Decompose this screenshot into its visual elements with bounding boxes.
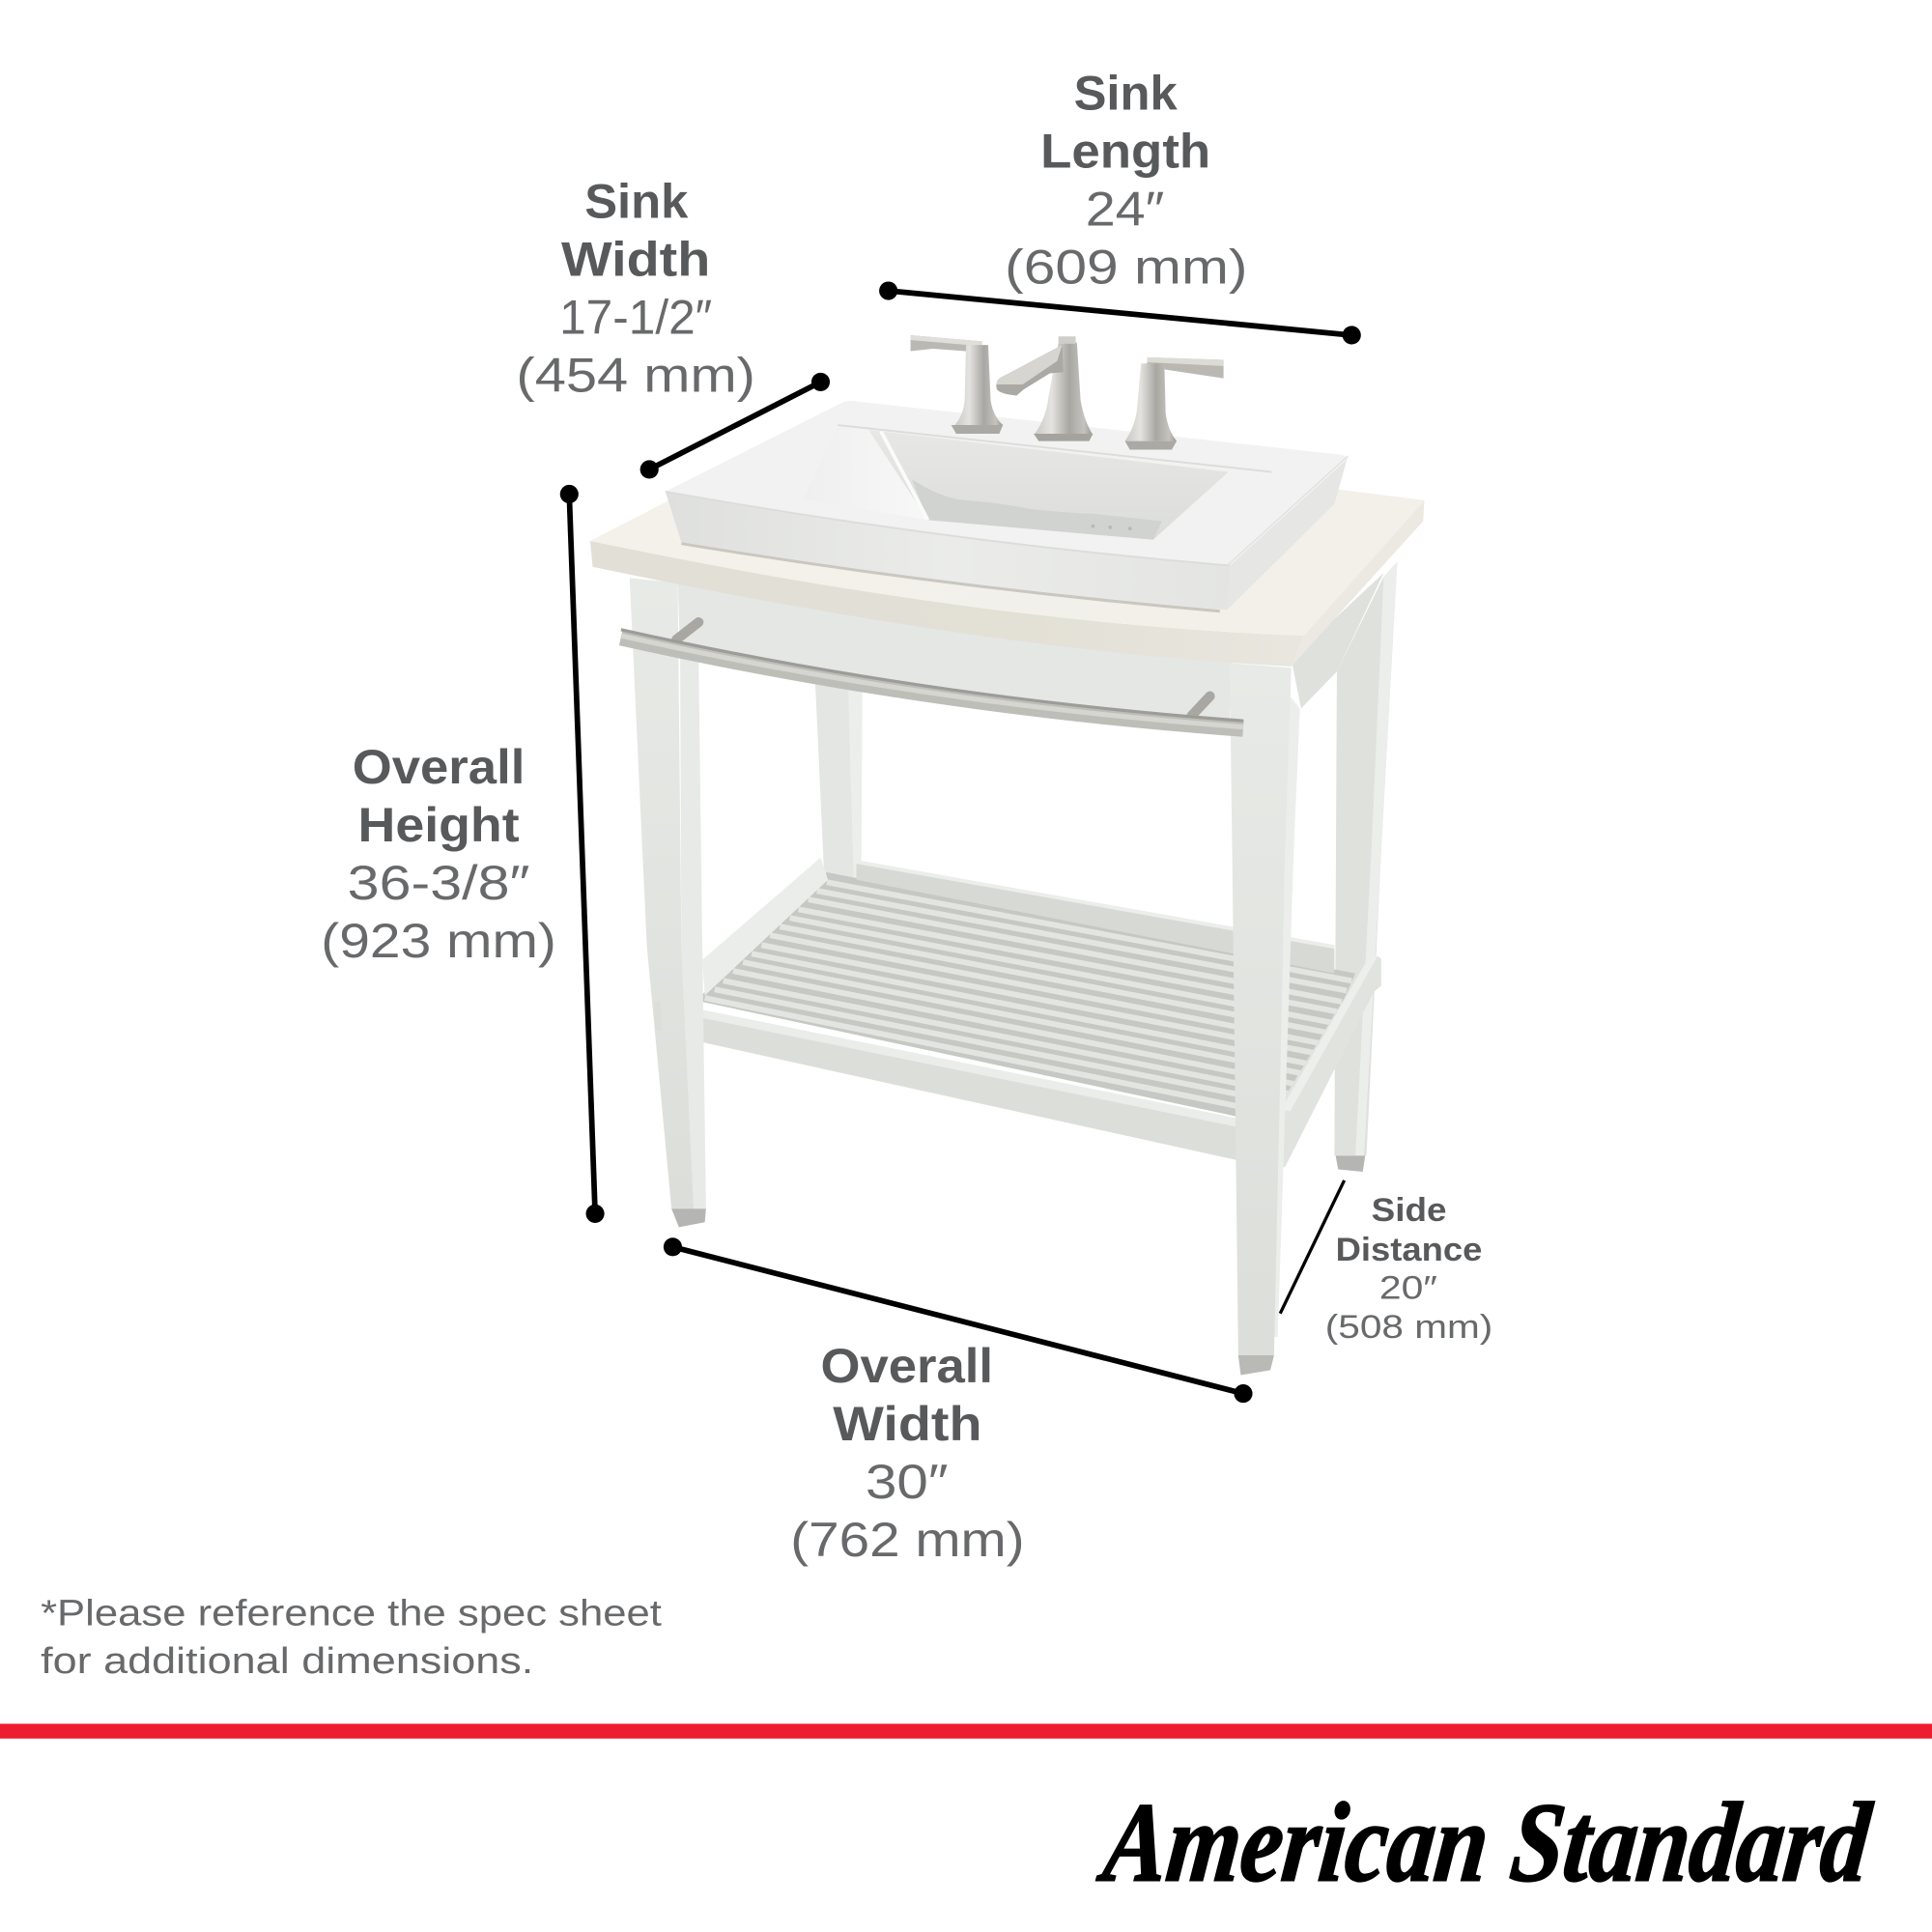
right handle: [1125, 357, 1224, 450]
sink bowl left wall: [804, 425, 927, 520]
back rail: [856, 860, 1334, 974]
label: sink width: Sink: [584, 175, 689, 229]
left handle: [911, 335, 1003, 434]
sink bowl back wall: [868, 430, 1229, 540]
counter top surface: [590, 489, 1424, 636]
label: side distance: [1325, 1192, 1492, 1346]
towel bar: [621, 622, 1243, 728]
dimension line: sink width: [640, 373, 830, 479]
label: side distance: Distance: [1336, 1232, 1482, 1268]
label: sink length: Length: [1040, 124, 1210, 178]
label: overall width: (762 mm): [790, 1513, 1025, 1567]
label: side distance: Side: [1372, 1192, 1446, 1229]
front rail: [693, 1008, 1239, 1161]
shelf floor: [696, 872, 1355, 1127]
label: side distance: (508 mm): [1325, 1309, 1492, 1346]
back left leg: [814, 666, 863, 878]
back right leg: [1334, 562, 1397, 1172]
label: overall width: [790, 1339, 1025, 1567]
label: sink length: 24″: [1086, 182, 1164, 236]
bowl edges: [881, 431, 927, 520]
label: overall width: Overall: [820, 1339, 993, 1393]
label: overall height: (923 mm): [321, 914, 556, 968]
front left leg: [630, 578, 706, 1227]
label: overall height: [321, 740, 556, 968]
label: overall height: Overall: [353, 740, 525, 794]
label: side distance: 20″: [1379, 1269, 1437, 1306]
label: overall width: 30″: [866, 1455, 949, 1509]
dimension line: overall height: [560, 485, 605, 1223]
sink rim: [666, 401, 1347, 565]
red divider bar: [0, 1723, 1932, 1739]
label: overall height: Height: [358, 798, 520, 852]
label: sink width: (454 mm): [516, 349, 755, 403]
side apron: [1292, 573, 1383, 708]
faucet: [911, 335, 1224, 450]
label: sink length: Sink: [1074, 67, 1178, 121]
product: sink console illustration: [590, 335, 1424, 1375]
dimension line: sink length: [879, 281, 1361, 345]
footnote: *Please reference the spec sheet: [41, 1592, 662, 1634]
slatted lower shelf: [693, 858, 1381, 1168]
counter front edge: [590, 541, 1303, 667]
slats: [705, 882, 1351, 1117]
label: sink width: 17-1/2″: [559, 291, 712, 345]
sink front face: [666, 492, 1230, 610]
dimension line: side distance: [1280, 1180, 1345, 1314]
countertop: [590, 489, 1424, 667]
center spout: [996, 336, 1093, 441]
label: sink width: [516, 175, 755, 403]
overflow holes: [1093, 526, 1130, 528]
label: sink length: (609 mm): [1005, 240, 1247, 294]
sink basin: [666, 401, 1348, 611]
label: overall height: 36-3/8″: [348, 856, 529, 910]
dimension line: overall width: [664, 1237, 1253, 1403]
label: sink length: [1005, 67, 1247, 294]
left rail: [702, 858, 828, 996]
front right leg: [1230, 663, 1300, 1375]
sink shadow: [681, 543, 1220, 611]
footnote: [41, 1592, 662, 1682]
label: overall width: Width: [833, 1397, 982, 1451]
sink bowl floor: [912, 479, 1162, 540]
footnote: for additional dimensions.: [41, 1640, 533, 1682]
label: sink width: Width: [561, 233, 710, 287]
front apron: [678, 579, 1233, 721]
right rail: [1278, 956, 1381, 1168]
sink right side: [1227, 456, 1348, 610]
